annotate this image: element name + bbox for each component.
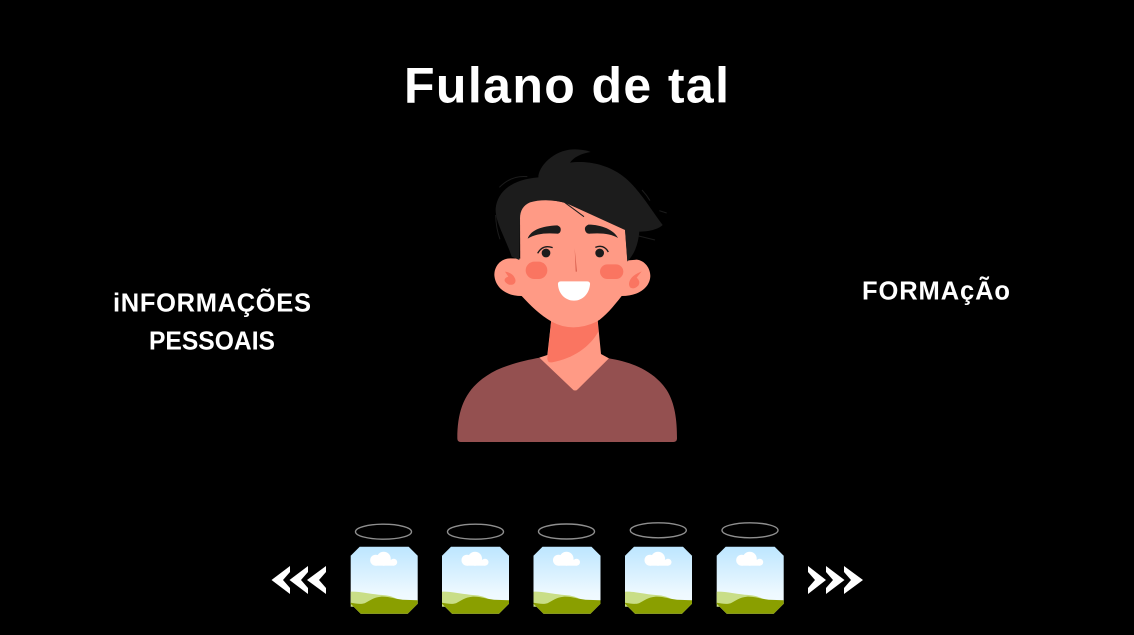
hair bbox=[496, 149, 663, 262]
eyes bbox=[542, 249, 604, 257]
text: formação: FORMAçÃo bbox=[862, 275, 1010, 305]
hair fringe line bbox=[565, 203, 584, 217]
hair strands bbox=[496, 176, 667, 240]
text: informações pessoais: PESSOAIS bbox=[149, 328, 275, 356]
right ear bbox=[617, 260, 650, 297]
neck bbox=[539, 317, 609, 391]
illustration: man portrait bbox=[457, 149, 677, 442]
halo ellipses bbox=[356, 523, 778, 539]
text: informações pessoais bbox=[113, 288, 311, 356]
arrows: left bbox=[272, 566, 326, 594]
neck shadow bbox=[547, 317, 598, 362]
face bbox=[520, 200, 627, 327]
cheeks bbox=[526, 262, 623, 279]
arrows: right bbox=[808, 566, 863, 594]
nose bbox=[575, 248, 577, 272]
title: Fulano de tal bbox=[404, 58, 729, 114]
text: informações pessoais: iNFORMAÇÕES bbox=[113, 288, 311, 318]
left eyebrow bbox=[528, 225, 561, 239]
right eyebrow bbox=[585, 225, 618, 238]
mouth bbox=[558, 281, 590, 301]
eyelids bbox=[538, 246, 608, 253]
ear details bbox=[505, 272, 516, 285]
image thumbnails bbox=[351, 547, 784, 614]
shirt bbox=[457, 358, 677, 442]
left ear bbox=[494, 258, 527, 296]
